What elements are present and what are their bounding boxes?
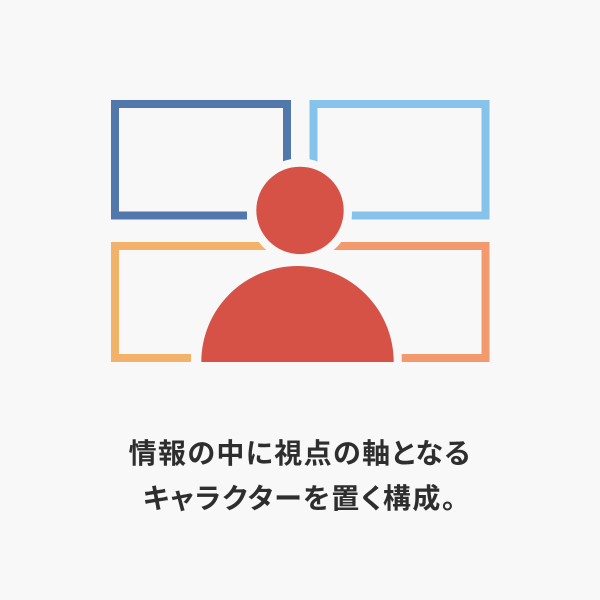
frame: bottom right coral bbox=[330, 246, 486, 358]
caption line 1: 情報の中に視点の軸となる bbox=[129, 438, 471, 469]
caption line 2: キャラクターを置く構成。 bbox=[143, 483, 457, 514]
icon: person head bbox=[256, 167, 344, 254]
frame: bottom left orange bbox=[115, 246, 270, 358]
icon: person body bbox=[201, 266, 394, 362]
frame: top left blue bbox=[115, 104, 287, 216]
head cutout gap bbox=[248, 158, 352, 262]
frame: top right light blue bbox=[314, 104, 486, 216]
